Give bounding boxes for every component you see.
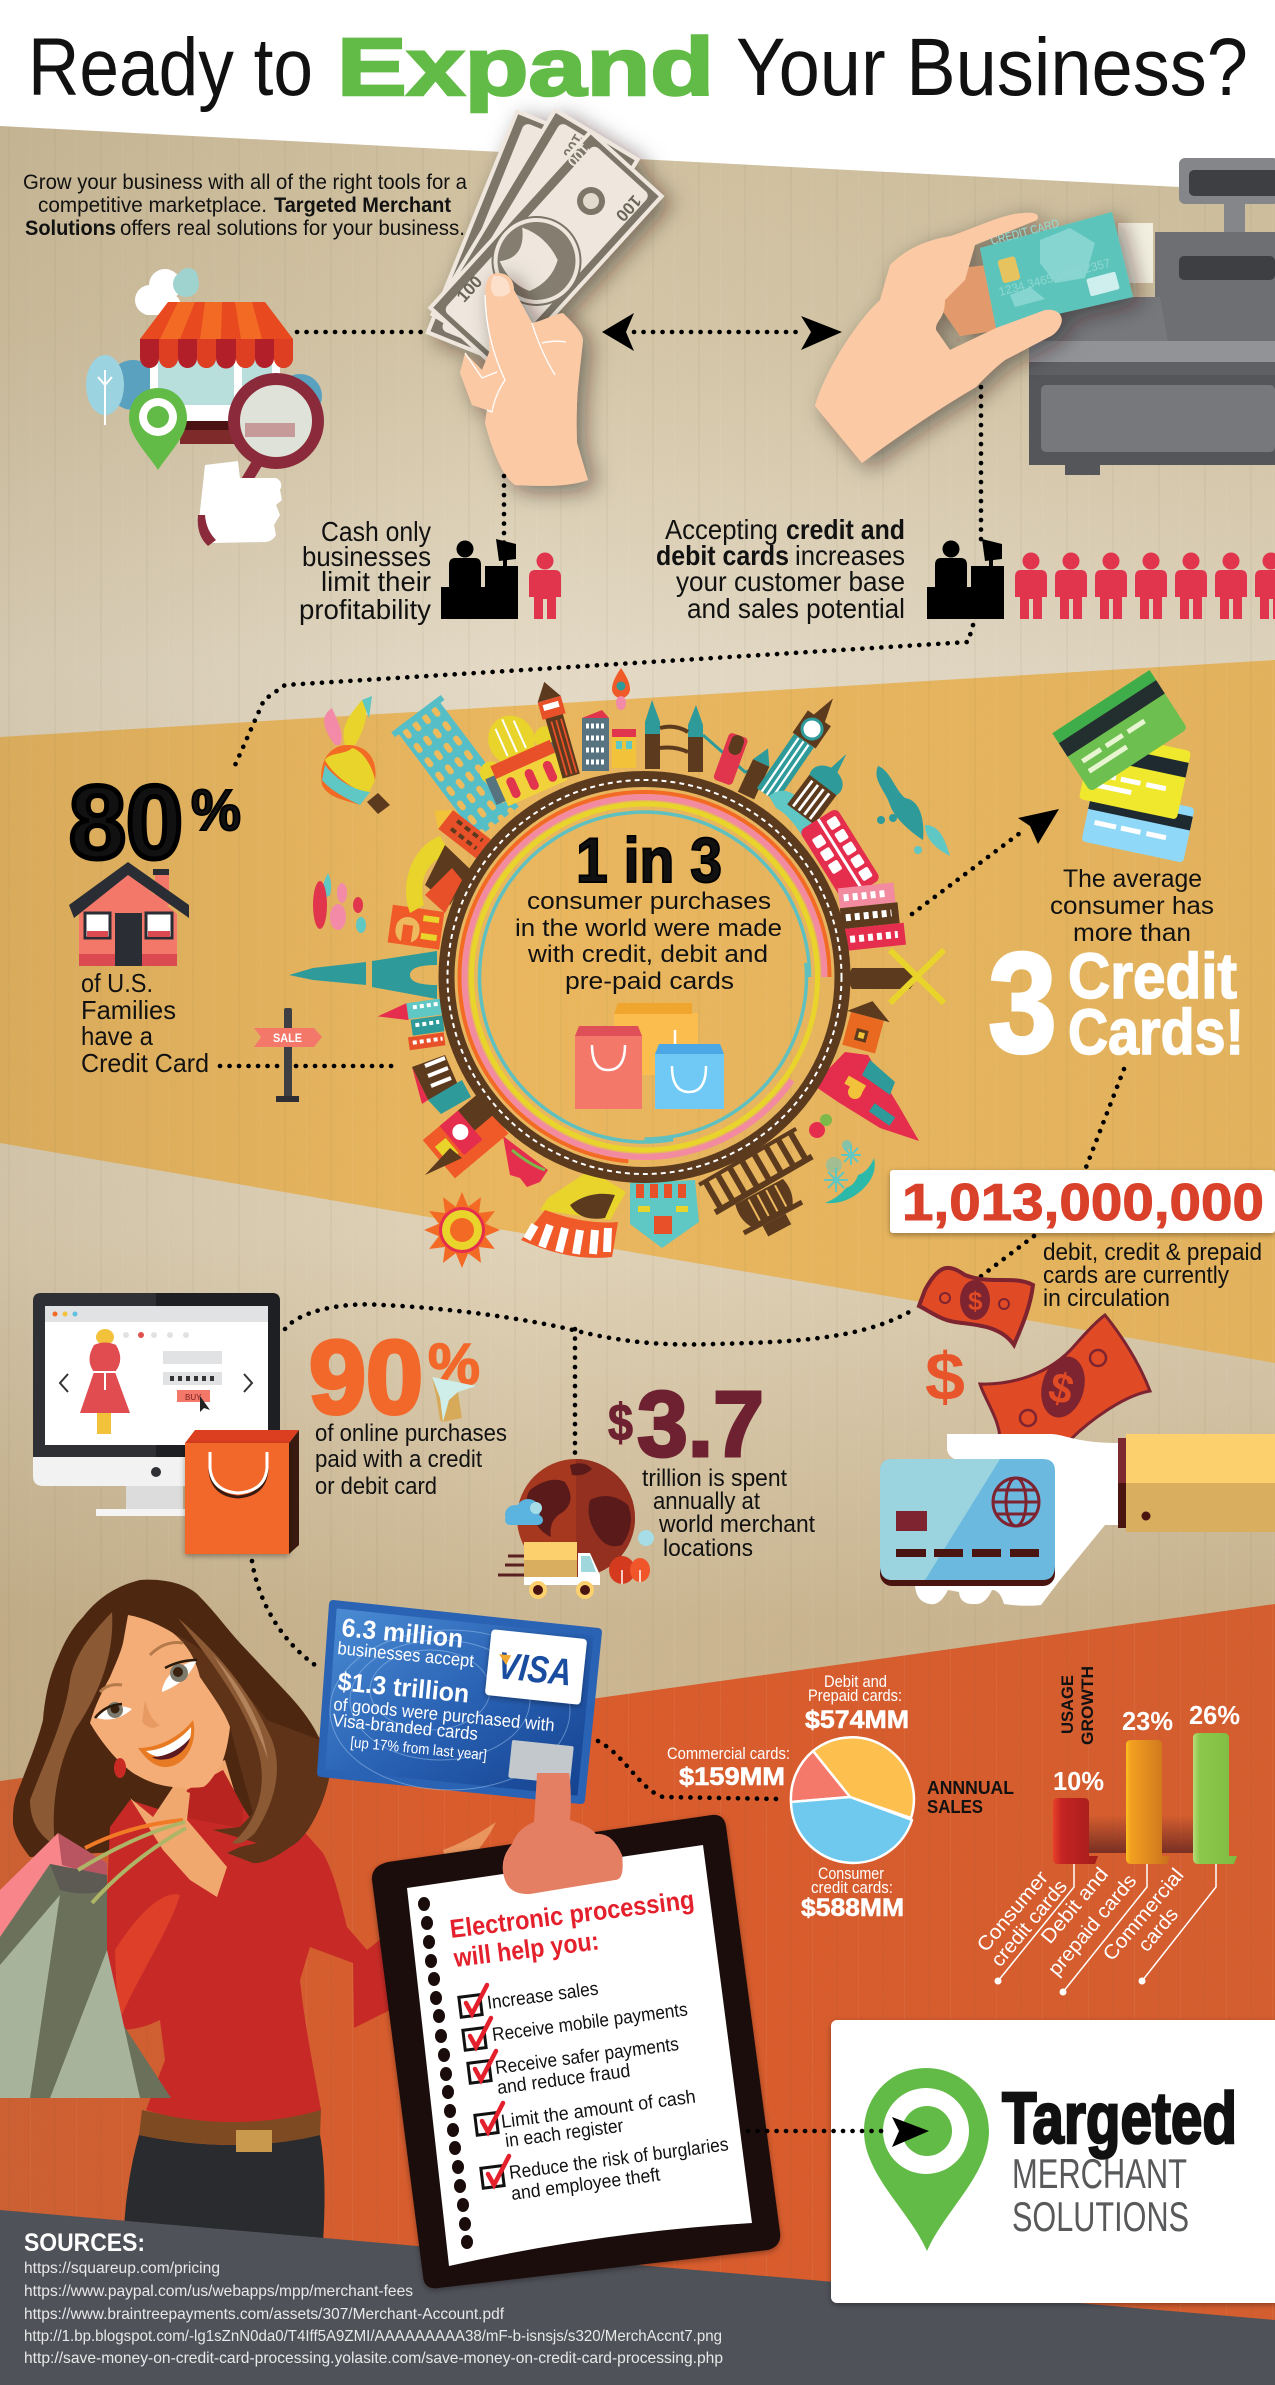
logo wordmark: SOLUTIONS	[1012, 2193, 1189, 2240]
sun	[424, 1192, 500, 1268]
leader lines and labels: prepaid cards	[1044, 1870, 1141, 1980]
teal dome	[786, 743, 861, 825]
text: 1 in 3: consumer purchases	[527, 888, 771, 915]
sources: https://www.paypal.com/us/webapps/mpp/merchant-fees	[24, 2283, 413, 2300]
text: cash only	[299, 516, 431, 625]
street row left	[377, 998, 450, 1054]
leader lines and labels: Debit and	[1037, 1864, 1113, 1948]
text: cash only: limit their	[321, 566, 431, 597]
sources: SOURCES:	[24, 2229, 145, 2257]
list items: Reduce the risk of burglaries	[508, 2134, 730, 2184]
icon: house	[69, 862, 189, 966]
icon: orange dollar sign: $	[925, 1339, 965, 1415]
right hand behind clipboard	[443, 1822, 496, 1875]
stat: 3 credit cards: Cards!	[1068, 996, 1244, 1068]
text: online purchases	[315, 1420, 507, 1500]
text: average consumer: more than	[1073, 919, 1191, 947]
leader lines and labels: Consumer	[973, 1867, 1053, 1956]
label: consumer credit: credit cards:	[811, 1878, 893, 1897]
clock tower	[533, 679, 583, 779]
icon: drop top	[612, 668, 630, 710]
coliseum yellow	[406, 836, 471, 913]
text: accepting cards: credit and	[786, 514, 905, 545]
text: accepting cards: Accepting	[665, 514, 778, 545]
sources: http://1.bp.blogspot.com/-lg1sZnN0da0/T4Iff5A9ZMI/AAAAAAAAA38/mF-b-isnsjs/s320/MerchAccnt7.png	[24, 2328, 722, 2345]
text: average consumer: consumer has	[1050, 892, 1214, 920]
face	[90, 1615, 231, 1788]
list items: Limit the amount of cash	[500, 2087, 697, 2133]
labels: pie chart top: Commercial cards:	[667, 1744, 790, 1763]
turtleneck	[183, 1770, 243, 1828]
list items: Receive mobile payments	[491, 1999, 689, 2046]
label: annual sales: ANNNUAL	[927, 1778, 1014, 1798]
chart: world city circle	[289, 679, 944, 1268]
red pill	[713, 732, 749, 786]
icon: shopping bags	[575, 1003, 724, 1109]
list items: in each register	[504, 2116, 625, 2152]
text: trillion is spent: annually at	[653, 1488, 760, 1515]
icon: cash register	[1029, 158, 1275, 475]
icon: small red bill: $	[968, 1286, 983, 1316]
label: consumer credit: Consumer	[818, 1864, 884, 1883]
text: 1 in 3: in the world were made	[515, 915, 782, 942]
text: average consumer: The average	[1063, 865, 1202, 893]
text: in circulation	[1043, 1239, 1262, 1312]
list items: Increase sales	[486, 1979, 600, 2014]
labels: pie chart top	[667, 1672, 909, 1791]
clipboard checklist	[372, 1773, 780, 2288]
sources: https://www.braintreepayments.com/assets/307/Merchant-Account.pdf	[24, 2306, 505, 2323]
background: yellow band	[0, 660, 1275, 1363]
icon: cursor	[432, 1377, 476, 1422]
list items	[486, 1979, 730, 2205]
dotted line: hand to cashier left	[502, 476, 506, 543]
buckle	[236, 2130, 272, 2152]
icon: sale sign: SALE	[273, 1031, 302, 1045]
icon: fan of dollar bills: 100	[453, 272, 486, 306]
belt	[139, 2108, 321, 2145]
neck	[170, 1760, 240, 1825]
icon: hand with credit card: 1234 3465 5689 2357	[997, 256, 1112, 299]
icon: cashier with one customer	[441, 539, 561, 619]
icon: computer monitor	[33, 1293, 280, 1516]
label: annual sales	[927, 1778, 1014, 1817]
dotted arrow: cash vs card	[602, 313, 842, 351]
sources: http://save-money-on-credit-card-processing.yolasite.com/save-money-on-credit-card-processing.php	[24, 2350, 723, 2367]
icon: hand holding cash	[460, 273, 588, 486]
visa card: 6.3 million	[340, 1612, 465, 1654]
text: 1 in 3	[515, 826, 782, 995]
text: online purchases: or debit card	[315, 1473, 437, 1500]
text: in circulation: debit, credit & prepaid	[1043, 1239, 1262, 1266]
red teal houses	[412, 1055, 471, 1114]
icon: hot air balloon	[321, 696, 390, 814]
text: of US families: Credit Card	[81, 1048, 209, 1078]
icon: small red bill	[919, 1268, 1033, 1345]
logo wordmark: MERCHANT	[1012, 2150, 1187, 2197]
leader lines and labels: credit cards	[987, 1876, 1072, 1971]
stat: 3 credit cards: 3	[988, 924, 1057, 1083]
domes	[462, 700, 575, 812]
logo wordmark	[1002, 2079, 1237, 2240]
title: Expand	[337, 22, 714, 113]
chart: usage growth bars: 23%	[1122, 1706, 1173, 1736]
dotted line: to red bill	[980, 1236, 1034, 1277]
teal cloud bottom right	[825, 1158, 875, 1203]
text: of US families: of U.S.	[81, 968, 153, 998]
chart: usage growth bars: USAGE	[1058, 1675, 1077, 1734]
text: accepting cards: debit cards	[656, 540, 789, 571]
big ben	[755, 691, 845, 803]
dotted line: to globe	[220, 1064, 398, 1068]
text: in circulation: cards are currently	[1043, 1262, 1229, 1289]
text: in circulation: in circulation	[1043, 1285, 1170, 1312]
stat: 90 percent	[309, 1320, 480, 1436]
visa card: Visa-branded cards	[332, 1710, 479, 1744]
dotted arrow: to credit cards	[912, 809, 1059, 914]
clip	[503, 1773, 623, 1894]
dotted line: card hand to cashier right	[979, 387, 983, 543]
icon: orange shopping bag	[185, 1430, 299, 1554]
text: cash only: profitability	[299, 594, 431, 625]
icon: store with pin and magnifier	[86, 268, 322, 546]
leader lines and labels	[973, 1864, 1216, 1996]
icon: fan of dollar bills: 100	[528, 129, 553, 159]
label: consumer credit	[801, 1864, 904, 1922]
intro text: competitive marketplace.	[38, 194, 267, 217]
stat: 90 percent: 90	[309, 1320, 423, 1436]
text: average consumer	[1050, 865, 1214, 947]
hair left highlights	[30, 1612, 112, 1845]
dotted arrow: to logo	[748, 2117, 929, 2147]
text: trillion is spent: trillion is spent	[642, 1465, 787, 1492]
background: dark footer band	[0, 2210, 1275, 2385]
text: 1 in 3: with credit, debit and	[527, 941, 768, 968]
hair back	[13, 1580, 331, 1857]
text: accepting cards	[656, 514, 905, 624]
hair right front lock	[173, 1633, 331, 1863]
icon: cashier with many customers	[927, 539, 1275, 619]
text: accepting cards: increases	[795, 540, 905, 571]
icon: big red bill	[980, 1315, 1150, 1440]
rings	[394, 726, 895, 1228]
sweater folds	[115, 1894, 180, 2025]
intro text: Solutions	[25, 217, 116, 240]
log cabin	[838, 995, 894, 1055]
icon: teal clouds right	[876, 766, 950, 856]
visa card: [up 17% from last year]	[350, 1734, 488, 1764]
red tile house	[427, 801, 491, 858]
stat: 80 percent: 80	[69, 765, 183, 881]
text: 1 in 3: 1 in 3	[576, 826, 722, 896]
intro text: Grow your business with all of the right tools for a	[23, 171, 467, 194]
canal houses	[838, 882, 906, 951]
eye right	[150, 1642, 197, 1692]
bridge arch	[769, 791, 816, 842]
pants	[123, 2135, 325, 2300]
eiffel tower	[289, 951, 437, 999]
labels: pie chart top: Prepaid cards:	[808, 1686, 902, 1705]
chart: usage growth bars: GROWTH	[1078, 1666, 1097, 1745]
intro text: Targeted Merchant	[274, 194, 451, 217]
icon: fan of dollar bills: 100	[564, 140, 593, 170]
orange gate	[388, 905, 444, 950]
icon: hand with credit card	[815, 212, 1133, 463]
text: of US families: have a	[81, 1021, 153, 1051]
text: trillion is spent: locations	[663, 1535, 753, 1562]
dotted line: visa to pie	[598, 1741, 780, 1799]
background: orange band	[0, 1604, 1275, 2385]
labels: pie chart top: $159MM	[679, 1763, 785, 1791]
labels: pie chart top: Debit and	[824, 1672, 887, 1691]
text: online purchases: paid with a credit	[315, 1446, 482, 1473]
icon: gloved hand with credit card	[880, 1434, 1275, 1606]
stat: 3 credit cards	[988, 924, 1244, 1083]
visa card: VISA	[496, 1645, 574, 1695]
logo pin	[864, 2068, 989, 2251]
title	[28, 22, 1248, 113]
label: consumer credit: $588MM	[801, 1894, 904, 1922]
icon: fan of dollar bills: 100	[559, 131, 587, 161]
labels: pie chart top: $574MM	[805, 1706, 909, 1734]
tower bridge	[645, 700, 768, 772]
heading: Electronic processing	[448, 1884, 696, 1944]
icon: hand with credit card: CREDIT CARD	[989, 216, 1061, 248]
bags	[0, 1833, 107, 2000]
list items: and employee theft	[510, 2164, 662, 2205]
small tower	[738, 745, 776, 799]
icon: sale sign	[254, 1008, 322, 1102]
heading	[448, 1884, 696, 1973]
illustration: woman shopper	[0, 1580, 496, 2300]
windmill	[849, 950, 944, 1003]
double decker bus	[799, 808, 881, 902]
text: online purchases: of online purchases	[315, 1420, 507, 1447]
mouth	[138, 1720, 194, 1767]
floral house	[503, 1136, 548, 1187]
text: cash only: businesses	[302, 541, 431, 572]
leader lines and labels: cards	[1134, 1904, 1183, 1956]
eye left	[95, 1685, 132, 1720]
text: of US families: Families	[81, 995, 176, 1025]
sources: https://squareup.com/pricing	[24, 2260, 220, 2277]
intro text: offers real solutions for your business.	[120, 217, 465, 240]
stat: 80 percent	[69, 765, 241, 881]
text: accepting cards: and sales potential	[687, 593, 905, 624]
text: cash only: Cash only	[321, 516, 431, 547]
chart: usage growth bars	[1053, 1666, 1240, 1864]
stat: $3.7 trillion: 3.7	[637, 1372, 764, 1476]
earring	[114, 1758, 126, 1778]
sources	[24, 2229, 723, 2367]
stat: $3.7 trillion: $	[608, 1394, 633, 1452]
text: 1 in 3: pre-paid cards	[565, 968, 734, 995]
background: white header	[0, 0, 1275, 192]
striped basket	[521, 1170, 626, 1258]
orange houses	[423, 1094, 510, 1178]
colosseum	[698, 1127, 814, 1215]
snowflakes	[824, 1145, 861, 1192]
icon: fan of dollar bills	[425, 108, 664, 375]
chart: annual sales pie	[791, 1737, 914, 1863]
dotted line: to circulation	[1085, 1069, 1124, 1170]
visa card: businesses accept	[337, 1638, 475, 1671]
dotted line: to 80 percent	[232, 625, 973, 772]
dotted line: bag to visa card	[252, 1561, 315, 1665]
icon: hearts	[313, 873, 366, 933]
visa card	[321, 1604, 598, 1800]
text: trillion is spent	[642, 1465, 815, 1562]
icon: computer monitor: BUY	[185, 1393, 202, 1402]
intro text	[23, 171, 467, 240]
small plants	[809, 1114, 852, 1173]
sweater	[97, 1770, 392, 2122]
icon: fan of dollar bills: 100	[612, 191, 645, 225]
icon: stacked credit cards	[1052, 670, 1195, 863]
text: of US families	[81, 968, 209, 1078]
heading: will help you:	[451, 1925, 601, 1973]
hand	[130, 1787, 227, 1897]
stat box: 1,013,000,000: 1,013,000,000	[902, 1174, 1264, 1232]
icon: big red bill: $	[1044, 1362, 1079, 1414]
visa card: $1.3 trillion	[336, 1666, 471, 1709]
stat: 3 credit cards: Credit	[1068, 940, 1237, 1012]
text: trillion is spent: world merchant	[658, 1511, 815, 1538]
list items: and reduce fraud	[496, 2061, 632, 2099]
chart: usage growth bars: 26%	[1189, 1700, 1240, 1730]
list items: Receive safer payments	[494, 2034, 680, 2079]
chart: usage growth bars: 10%	[1053, 1766, 1104, 1796]
red church	[813, 1052, 919, 1141]
visa card: of goods were purchased with	[333, 1694, 556, 1735]
stat: 80 percent: %	[191, 778, 241, 843]
dotted line: to globe	[573, 1329, 577, 1461]
logo panel	[831, 2020, 1275, 2303]
dotted line: store to cash	[297, 330, 430, 334]
dotted line: wavy monitor to bill	[285, 1304, 911, 1344]
label: annual sales: SALES	[927, 1797, 983, 1817]
title: Ready to	[28, 22, 313, 113]
leader lines and labels: Commercial	[1099, 1865, 1188, 1965]
row houses	[582, 710, 636, 771]
leaning tower	[391, 695, 523, 841]
nose	[142, 1700, 160, 1728]
stat: 90 percent: %	[428, 1332, 480, 1397]
handles	[85, 1820, 183, 1848]
checkboxes	[459, 1985, 509, 2188]
text: accepting cards: your customer base	[676, 566, 905, 597]
teal facade bottom	[630, 1180, 699, 1248]
icon: globe with truck	[498, 1459, 654, 1599]
